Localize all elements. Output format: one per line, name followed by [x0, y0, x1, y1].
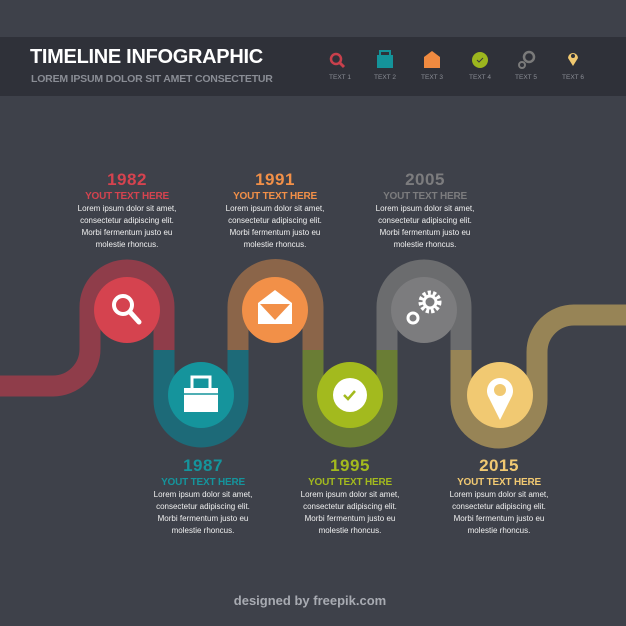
text block 1995: Morbi fermentum justo eu — [305, 514, 395, 523]
text block 2015: YOUT TEXT HERE — [457, 477, 541, 488]
text block 2015: Morbi fermentum justo eu — [454, 514, 544, 523]
legend icons: TEXT 2 — [374, 74, 396, 81]
circle: clock — [317, 362, 383, 428]
text block 1995: YOUT TEXT HERE — [308, 477, 392, 488]
footer credit: designed by freepik.com — [234, 593, 386, 608]
legend icons: TEXT 1 — [329, 74, 351, 81]
text block 1982: YOUT TEXT HERE — [85, 191, 169, 202]
icon: pin — [568, 53, 578, 66]
icon: clock — [472, 52, 488, 68]
text block 1995: Lorem ipsum dolor sit amet, — [301, 490, 399, 499]
text block 1995: consectetur adipiscing elit. — [303, 502, 397, 511]
text block 2015 — [450, 456, 548, 535]
legend icons — [329, 50, 584, 81]
text block 2005: 2005 — [405, 170, 445, 189]
icon: bag — [377, 51, 393, 68]
text block 1982: Morbi fermentum justo eu — [82, 228, 172, 237]
text block 1987 — [154, 456, 252, 535]
subtitle: LOREM IPSUM DOLOR SIT AMET CONSECTETUR — [31, 73, 273, 85]
text block 1991: Morbi fermentum justo eu — [230, 228, 320, 237]
text block 1995: 1995 — [330, 456, 370, 475]
text block 1991: consectetur adipiscing elit. — [228, 216, 322, 225]
text block 1987: YOUT TEXT HERE — [161, 477, 245, 488]
legend icons: TEXT 4 — [469, 74, 491, 81]
text block 1982: Lorem ipsum dolor sit amet, — [78, 204, 176, 213]
text block 2005: YOUT TEXT HERE — [383, 191, 467, 202]
text block 1991 — [226, 170, 324, 249]
text block 1982: molestie rhoncus. — [96, 240, 158, 249]
legend icons: TEXT 5 — [515, 74, 537, 81]
text block 1987: molestie rhoncus. — [172, 526, 234, 535]
text block 1995 — [301, 456, 399, 535]
text block 2015: consectetur adipiscing elit. — [452, 502, 546, 511]
legend icons: TEXT 3 — [421, 74, 443, 81]
text block 1991: 1991 — [255, 170, 295, 189]
text block 2005: consectetur adipiscing elit. — [378, 216, 472, 225]
text block 2005 — [376, 170, 474, 249]
text block 1987: Lorem ipsum dolor sit amet, — [154, 490, 252, 499]
text block 1991: molestie rhoncus. — [244, 240, 306, 249]
text block 1982: consectetur adipiscing elit. — [80, 216, 174, 225]
text block 2005: Morbi fermentum justo eu — [380, 228, 470, 237]
text block 1991: Lorem ipsum dolor sit amet, — [226, 204, 324, 213]
header band — [0, 37, 626, 96]
icon: search — [331, 54, 344, 67]
legend icons: TEXT 6 — [562, 74, 584, 81]
text block 1982 — [78, 170, 176, 249]
text block 2005: Lorem ipsum dolor sit amet, — [376, 204, 474, 213]
icon: gears — [519, 52, 534, 68]
text block 1991: YOUT TEXT HERE — [233, 191, 317, 202]
circle: bag — [168, 362, 234, 428]
text block 1995: molestie rhoncus. — [319, 526, 381, 535]
text block 2015: molestie rhoncus. — [468, 526, 530, 535]
icon: envelope — [424, 51, 440, 68]
title: TIMELINE INFOGRAPHIC — [30, 46, 263, 68]
circle: envelope — [242, 277, 308, 343]
text block 1987: consectetur adipiscing elit. — [156, 502, 250, 511]
text block 2005: molestie rhoncus. — [394, 240, 456, 249]
text block 2015: Lorem ipsum dolor sit amet, — [450, 490, 548, 499]
text block 1987: Morbi fermentum justo eu — [158, 514, 248, 523]
text block 1982: 1982 — [107, 170, 147, 189]
circle: gears — [391, 277, 457, 343]
circle: search — [94, 277, 160, 343]
circle: pin — [467, 362, 533, 428]
text block 2015: 2015 — [479, 456, 519, 475]
text block 1987: 1987 — [183, 456, 223, 475]
